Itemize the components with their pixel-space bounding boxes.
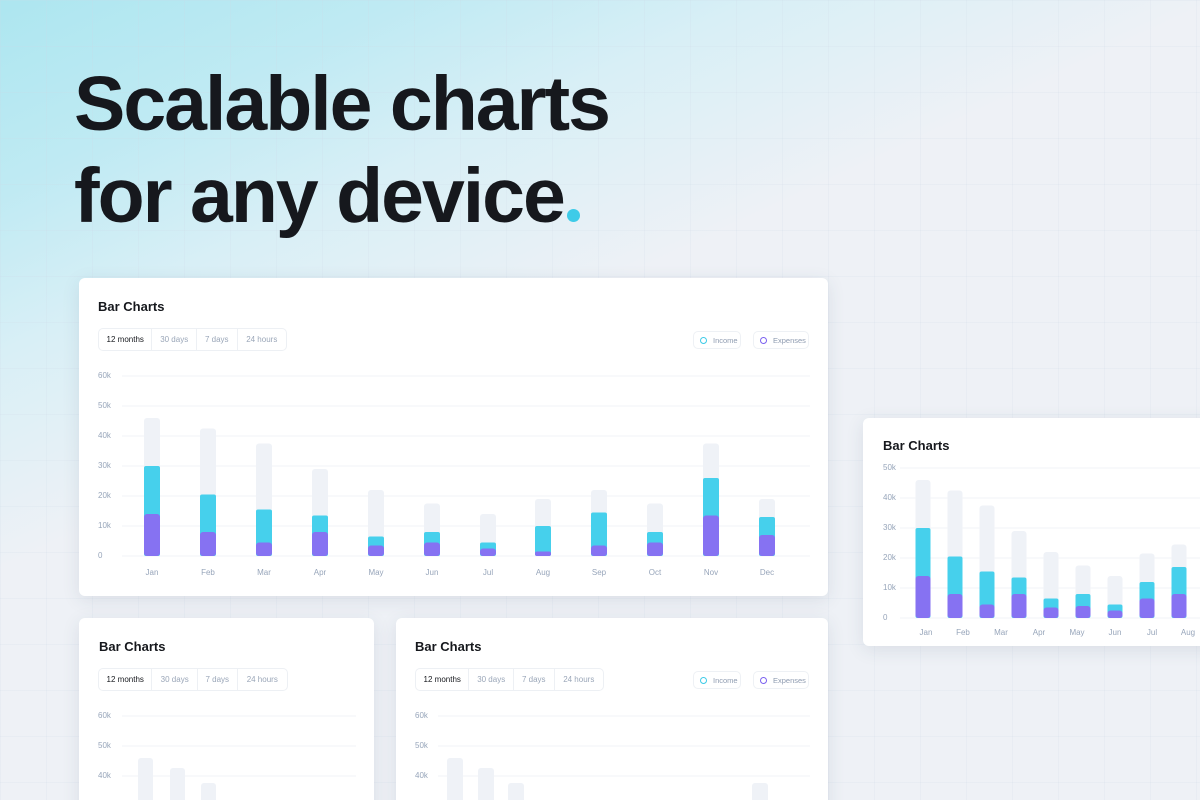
x axis labels: Jul [1147, 628, 1157, 637]
tabs: 30 days [161, 675, 189, 684]
legend: income [693, 331, 741, 349]
card title: Bar Charts [415, 639, 481, 654]
tabs: 24 hours [247, 675, 278, 684]
x axis labels: May [368, 568, 384, 577]
y axis labels: 30k [98, 461, 112, 470]
card title: Bar Charts [99, 639, 165, 654]
x axis labels: Sep [592, 568, 607, 577]
y axis labels [98, 371, 112, 560]
x axis labels: May [1069, 628, 1085, 637]
y axis labels: 50k [98, 401, 112, 410]
panel: main bar chart card [79, 278, 828, 596]
tabs: 7 days [205, 335, 229, 344]
card title: Bar Charts [98, 299, 164, 314]
x axis labels: Jul [483, 568, 493, 577]
tabs: 24 hours [563, 675, 594, 684]
y axis labels: 50k [883, 463, 897, 472]
x axis labels [920, 628, 1195, 637]
x axis labels: Aug [1181, 628, 1195, 637]
x axis labels: Mar [257, 568, 271, 577]
x axis labels: Feb [956, 628, 970, 637]
y axis labels: 20k [98, 491, 112, 500]
legend: income [693, 671, 741, 689]
bottom-right chart [415, 711, 810, 800]
x axis labels: Aug [536, 568, 550, 577]
legend: income: Income [713, 676, 738, 684]
title: Scalable charts [74, 61, 609, 147]
legend: expenses [753, 331, 809, 349]
y axis labels [883, 463, 897, 622]
x axis labels: Jan [920, 628, 932, 637]
tabs: 12 months [107, 675, 144, 684]
panel: bottom-left card [79, 618, 374, 800]
tabs [415, 668, 604, 691]
panel: right card [863, 418, 1200, 646]
x axis labels: Mar [994, 628, 1008, 637]
y axis labels: 0 [883, 613, 888, 622]
tabs: 12 months [424, 675, 461, 684]
legend: expenses: Expenses [773, 676, 806, 684]
y axis labels: 40k [883, 493, 897, 502]
right chart [883, 463, 1200, 637]
legend: expenses: Expenses [773, 336, 806, 344]
bottom-right chart: 60k [415, 711, 429, 720]
x axis labels: Jun [1109, 628, 1121, 637]
x axis labels: Oct [649, 568, 662, 577]
bottom-left chart: 60k [98, 711, 112, 720]
y axis labels: 30k [883, 523, 897, 532]
y axis labels: 60k [98, 371, 112, 380]
legend: expenses [753, 671, 809, 689]
x axis labels: Dec [760, 568, 774, 577]
bottom-left chart: 40k [98, 771, 112, 780]
x axis labels: Apr [1033, 628, 1046, 637]
y axis labels: 40k [98, 431, 112, 440]
bars [916, 480, 1186, 618]
x axis labels: Jan [146, 568, 158, 577]
main chart [98, 371, 810, 577]
tabs [98, 668, 288, 691]
tabs: 30 days [477, 675, 505, 684]
tabs: 30 days [160, 335, 188, 344]
x axis labels: Feb [201, 568, 215, 577]
y axis labels: 20k [883, 553, 897, 562]
card title: Bar Charts [883, 438, 949, 453]
legend: income: Income [713, 336, 738, 344]
x axis labels [146, 568, 774, 577]
y axis labels: 10k [883, 583, 897, 592]
x axis labels: Nov [704, 568, 718, 577]
y axis labels: 0 [98, 551, 103, 560]
title [74, 61, 609, 239]
tabs: 24 hours [246, 335, 277, 344]
title: for any device [74, 153, 564, 239]
bottom-left chart: 50k [98, 741, 112, 750]
x axis labels: Jun [426, 568, 438, 577]
x axis labels: Apr [314, 568, 327, 577]
tabs: 12 months [107, 335, 144, 344]
tabs: 7 days [522, 675, 546, 684]
panel: bottom-right card [396, 618, 828, 800]
bottom-left chart [98, 711, 356, 800]
tabs [98, 328, 287, 351]
tabs: 7 days [205, 675, 229, 684]
bottom-right chart: 40k [415, 771, 429, 780]
bottom-right chart: 50k [415, 741, 429, 750]
y axis labels: 10k [98, 521, 112, 530]
bars [144, 418, 775, 556]
